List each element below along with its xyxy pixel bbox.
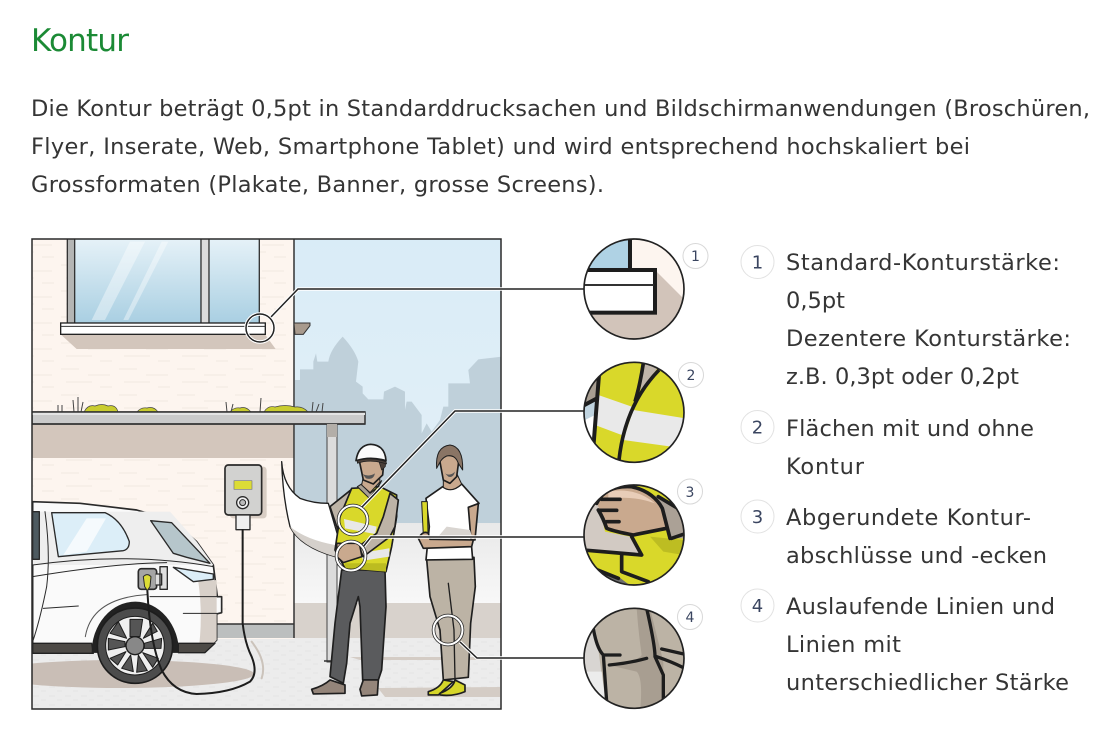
car shadow	[32, 660, 254, 688]
leader line 1	[246, 289, 584, 342]
list item 3: 3	[752, 507, 763, 528]
list item 3: abschlüsse und -ecken	[786, 543, 1047, 569]
number badge 4	[678, 604, 702, 630]
list item 4: Auslaufende Linien und	[786, 594, 1055, 620]
leader line 3	[336, 537, 584, 570]
number badge 2: 2	[687, 368, 695, 384]
detail circle 4: trouser knee	[582, 607, 688, 713]
roof canopy with plants	[32, 397, 365, 424]
list item 1: 1	[752, 252, 763, 274]
charging station	[225, 465, 267, 530]
charging cable and plug	[143, 530, 263, 694]
list item 1: z.B. 0,3pt oder 0,2pt	[786, 364, 1019, 390]
list item 2: Kontur	[786, 454, 865, 480]
sky and skyline background	[32, 239, 502, 709]
woman with folder	[418, 445, 479, 695]
list item 3: Abgerundete Kontur-	[786, 505, 1031, 531]
illustration frame	[32, 239, 501, 709]
number badge 2	[678, 362, 704, 388]
number badge 1: 1	[691, 249, 700, 265]
list item 3	[741, 500, 1047, 569]
intro paragraph: Flyer, Inserate, Web, Smartphone Tablet) und wird entsprechend hochskaliert bei	[31, 134, 970, 160]
number badge 3: 3	[686, 485, 694, 501]
title: Kontur	[31, 23, 129, 59]
construction worker	[282, 444, 398, 696]
number badge 1	[683, 244, 708, 268]
canopy post	[324, 424, 338, 662]
number badge 3	[678, 479, 702, 504]
car body	[33, 502, 222, 653]
detail circle 1: window sill	[583, 238, 685, 340]
illustration: street scene	[0, 238, 502, 709]
list item 2: Flächen mit und ohne	[786, 416, 1034, 442]
list item 1: Dezentere Konturstärke:	[786, 326, 1071, 352]
intro paragraph: Grossformaten (Plakate, Banner, grosse Screens).	[31, 172, 604, 198]
list item 1: Standard-Konturstärke:	[786, 250, 1060, 276]
list item 2	[741, 410, 1034, 480]
car rear wheel	[92, 602, 179, 683]
plan sheet	[282, 462, 340, 557]
list item 1: 0,5pt	[786, 288, 845, 314]
leader line 4	[434, 616, 584, 658]
list item 4	[741, 589, 1069, 696]
list item 4: Linien mit	[786, 632, 901, 658]
window and sill	[61, 238, 310, 349]
intro paragraph: Die Kontur beträgt 0,5pt in Standarddrucksachen und Bildschirmanwendungen (Broschüren,	[31, 96, 1090, 122]
charging station and car	[33, 465, 267, 694]
leader line 2	[338, 411, 584, 534]
list item 2: 2	[752, 418, 763, 438]
list item 1	[741, 246, 1071, 390]
detail circle 2: safety vest	[582, 360, 688, 467]
intro paragraph	[31, 96, 1090, 198]
number badge 4: 4	[686, 610, 695, 626]
list item 4: unterschiedlicher Stärke	[786, 670, 1069, 696]
building facade	[32, 239, 294, 639]
list item 4: 4	[752, 596, 763, 617]
detail circle 3: hand	[582, 483, 688, 590]
